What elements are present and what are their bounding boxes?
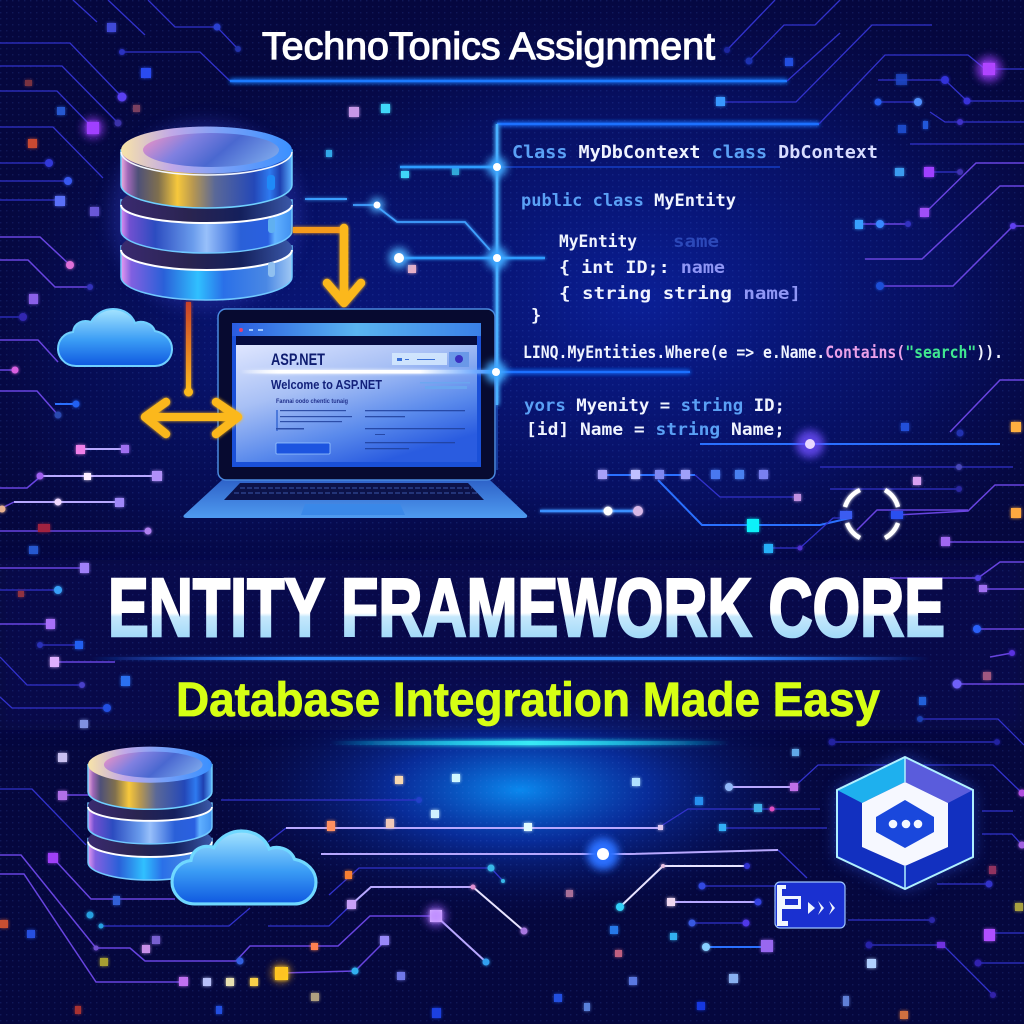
code: entity name line: MyEntity — [559, 232, 637, 252]
laptop base — [183, 480, 527, 518]
hexagon chat icon — [837, 757, 973, 889]
screen: welcome heading: Welcome to ASP.NET — [271, 378, 382, 392]
screen: text lines — [276, 382, 470, 449]
code: entity class line: public class MyEntity — [521, 191, 736, 211]
badge: chevrons — [808, 901, 835, 915]
code listing — [512, 142, 1003, 440]
screen: search box — [392, 352, 469, 367]
code: assignment line one: yors Myenity = string ID; — [524, 396, 785, 416]
code: faded word: same — [673, 232, 719, 252]
subtitle: Database Integration Made Easy — [176, 674, 880, 727]
cloud icon: bottom — [172, 831, 316, 904]
cloud icon: left — [58, 309, 172, 366]
laptop screen — [232, 323, 481, 467]
circuit traces: bottom — [0, 742, 1024, 995]
small database disc: middle — [88, 790, 212, 844]
hexagon: message dots — [889, 820, 922, 828]
database icon: large — [110, 120, 302, 310]
code: assignment line two: [id] Name = string Name; — [526, 420, 785, 440]
screen light streak — [240, 370, 497, 374]
laptop bezel — [218, 309, 495, 480]
code: DbContext class line: Class MyDbContext class DbContext — [512, 142, 878, 163]
circuit traces: left — [0, 317, 157, 708]
database disc: top — [121, 126, 292, 208]
panel frame flare on screen streak — [485, 361, 507, 383]
circuit traces: right — [540, 80, 1024, 745]
code: LINQ query: LINQ.MyEntities.Where(e => e.Name.Contains("search")). — [523, 343, 1003, 363]
badge: glyph — [777, 885, 801, 926]
circuit traces: top left — [0, 0, 238, 287]
small database disc: bottom — [88, 823, 212, 880]
code: name property line: { string string name] — [559, 284, 801, 304]
orange arrow: database to laptop — [293, 228, 361, 303]
screen: sub heading: Fannai oodo chentic tunaig — [276, 398, 348, 405]
code: closing brace: } — [531, 306, 541, 326]
database disc: middle — [121, 183, 292, 253]
glowing horizontal bus lines — [90, 0, 1024, 745]
screen: button — [276, 443, 330, 454]
laptop — [183, 309, 527, 518]
code panel frame — [305, 124, 690, 470]
ring icon — [840, 490, 903, 538]
screen: ASP.NET logo text: ASP.NET — [271, 350, 325, 369]
top label: TechnoTonics Assignment — [262, 26, 715, 68]
database disc: bottom — [121, 226, 292, 300]
code: id property line: { int ID;: name — [559, 258, 725, 278]
database icon: small — [88, 747, 212, 880]
small database disc: top — [88, 747, 212, 809]
orange connector and double arrow — [145, 302, 238, 434]
small terminal badge icon — [775, 882, 845, 928]
